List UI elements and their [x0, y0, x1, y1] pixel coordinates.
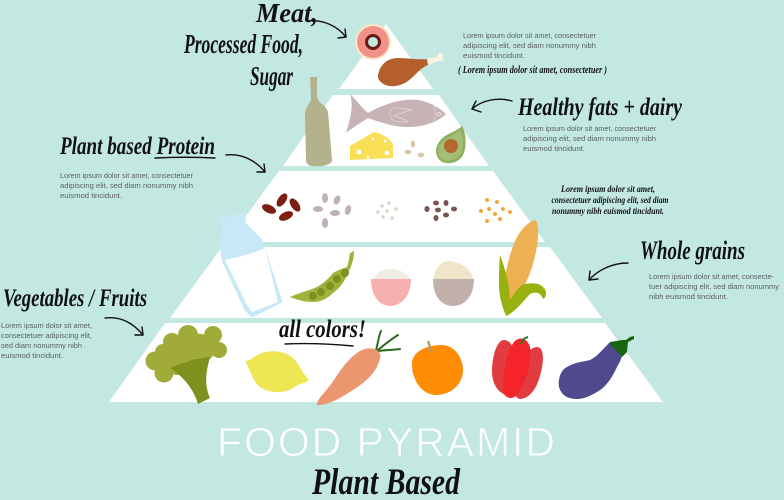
text block: top tier: euismod tincidunt.: [463, 51, 525, 60]
text block: healthy fats: Lorem ipsum dolor sit amet, consectetuer: [523, 124, 657, 133]
text block: whole grains: nibh euismod tincidunt.: [649, 292, 728, 301]
heading: Whole grains: Whole grains: [640, 236, 745, 265]
icon: avocado: [436, 126, 466, 163]
arrow: to fourth tier: [589, 263, 628, 280]
icon: chicken leg: [378, 52, 444, 86]
icon: nuts: [404, 140, 424, 157]
title: Food Pyramid: FOOD PYRAMID: [217, 419, 555, 465]
icon: corn: [499, 220, 546, 316]
heading: Meat, Processed Food, Sugar: Sugar: [250, 61, 293, 91]
icon: pale seeds: [313, 193, 352, 228]
text block: plant protein: adipiscing elit, sed diam nonummy nibh: [60, 181, 193, 190]
label: all colors: all colors!: [279, 316, 366, 343]
icon: olive oil bottle: [305, 77, 332, 166]
icon: donut: [355, 24, 391, 60]
underline: all colors: [285, 344, 353, 346]
icon: bowl of grains: [433, 261, 474, 306]
text block: vegetables: sed diam nonummy nibh: [1, 341, 82, 350]
icon: fish: [346, 94, 446, 133]
icon: pea pod: [290, 251, 354, 302]
arrow: to third tier: [226, 155, 265, 172]
text block: healthy fats: [523, 124, 657, 153]
text block: top tier: [463, 31, 597, 60]
text block: plant protein: euismod tincidunt.: [60, 191, 122, 200]
text block: vegetables: Lorem ipsum dolor sit amet,: [1, 321, 92, 330]
icon: yellow lentils: [479, 198, 512, 223]
text block: top tier: Lorem ipsum dolor sit amet, consectetuer: [463, 31, 597, 40]
text block: plant protein: [60, 171, 194, 200]
pyramid: [109, 24, 663, 402]
text block: vegetables: consectetuer adipiscing elit,: [1, 331, 92, 340]
text block: whole grains: [649, 272, 779, 301]
icon: cheese: [350, 132, 393, 160]
text block: whole grains: tuer adipiscing elit, sed diam nonummy: [649, 282, 779, 291]
icon: broccoli: [146, 325, 227, 404]
text block: healthy fats: euismod tincidunt.: [523, 144, 585, 153]
text block: vegetables: euismod tincidunt.: [1, 351, 63, 360]
icon: lemon: [245, 351, 309, 392]
text block: whole grains: Lorem ipsum dolor sit amet, consecte-: [649, 272, 775, 281]
text block: vegetables: [1, 321, 92, 360]
heading: Meat, Processed Food, Sugar: Processed Food,: [183, 29, 303, 59]
heading: Meat, Processed Food, Sugar: [183, 0, 318, 91]
underline: Protein: [155, 156, 215, 159]
text block: plant protein: Lorem ipsum dolor sit amet, consectetuer: [60, 171, 194, 180]
icon: brown lentils: [424, 200, 457, 221]
icon: small grains: [376, 201, 398, 220]
text block: healthy fats: adipiscing elit, sed diam nonummy nibh: [523, 134, 656, 143]
icon: orange: [412, 341, 463, 395]
heading: Healthy fats + dairy: Healthy fats + dairy: [517, 94, 683, 121]
text block: top tier: adipiscing elit, sed diam nonummy nibh: [463, 41, 596, 50]
heading: Plant based Protein: Plant based Protein: [59, 133, 215, 160]
icon: milk bottle: [219, 213, 282, 317]
arrow: to top tier: [308, 21, 346, 38]
heading: Vegetables / Fruits: Vegetables / Fruits: [3, 285, 147, 312]
note: third tier: Lorem ipsum dolor sit amet,: [560, 185, 655, 195]
icon: eggplant: [559, 336, 634, 399]
icon: bowl of rice: [371, 269, 411, 306]
arrow: to fifth tier: [105, 318, 143, 335]
note: top tier: ( Lorem ipsum dolor sit amet, consectetuer ): [458, 65, 607, 76]
icon: carrot: [317, 331, 400, 405]
note: third tier: [552, 185, 668, 217]
note: third tier: consectetuer adipiscing elit, sed diam: [552, 196, 668, 206]
icon: red pepper: [492, 337, 543, 399]
note: third tier: nonummy nibh euismod tincidunt.: [552, 207, 664, 217]
icon: kidney beans: [261, 192, 303, 223]
arrow: to second tier: [472, 99, 512, 112]
